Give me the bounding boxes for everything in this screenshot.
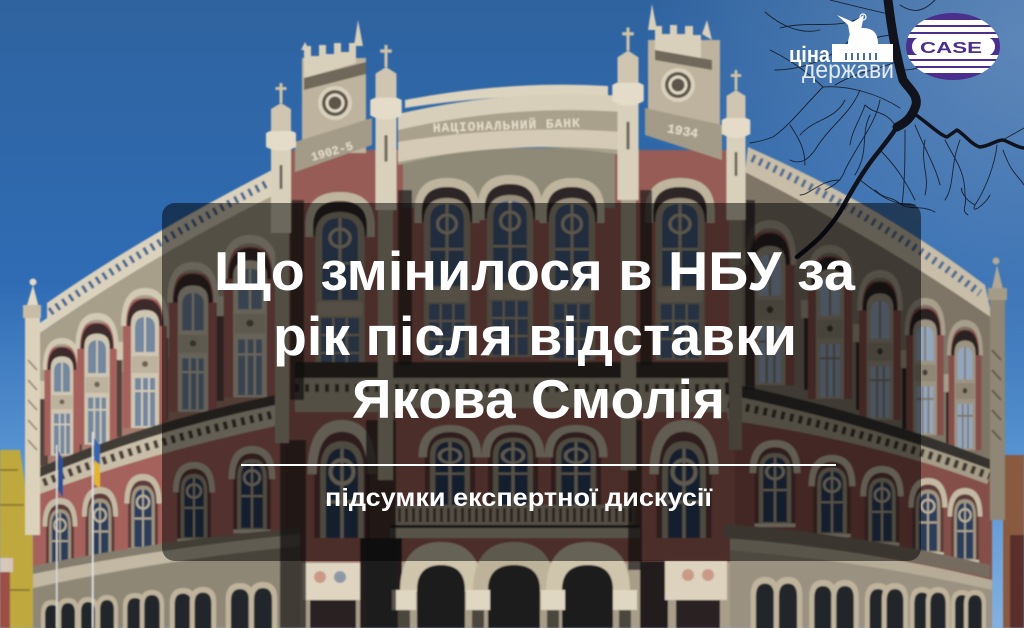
facade: centre rusticated stone: [403, 148, 615, 208]
logo: CASE: [900, 13, 1010, 80]
central portal arches: [392, 542, 637, 628]
ground floor centre: [300, 538, 730, 628]
lower cornice: left: [33, 534, 300, 588]
left tower: 1902-5: [309, 139, 355, 165]
facade: right wing wall: [725, 165, 992, 628]
lower row windows: centre: [308, 420, 718, 563]
ground floor stone: right: [725, 542, 992, 628]
turret lower shafts: [275, 200, 742, 480]
lower cornice: right: [725, 538, 992, 590]
logo wordmark: ціна: [789, 42, 831, 67]
lower row windows: right wing: [750, 440, 982, 563]
ground floor arcade: right: [751, 577, 986, 628]
turrets: [266, 28, 750, 233]
centre balcony band: [295, 362, 728, 412]
background: neighbouring brick building right: [1003, 455, 1024, 628]
logo wordmark: CASE: [920, 40, 982, 57]
right sill band: [725, 524, 990, 578]
pilasters: [37, 296, 957, 466]
facade: centre brick: [285, 150, 735, 628]
left wing middle cornice: [33, 393, 285, 495]
left tower: [295, 20, 372, 172]
title: Якова Смолія: [352, 368, 725, 430]
ground floor stone: left: [33, 540, 300, 628]
facade: left wing lower brick: [33, 405, 300, 628]
dark title panel: [162, 203, 921, 561]
facade: right wing lower brick: [725, 400, 992, 628]
logo: Ціна держави: держави: [802, 56, 894, 84]
title: Що змінилося в НБУ за: [214, 240, 855, 302]
tree branches: [750, 0, 1024, 257]
logo icon: parliament with bird: [832, 14, 893, 62]
divider line: [241, 464, 836, 466]
subtitle: підсумки експертної дискусії: [325, 484, 713, 512]
left sill band: [33, 528, 300, 582]
balconies: [303, 561, 727, 628]
shadow columns: [280, 190, 755, 628]
background: scaffolded neighbouring building: [0, 450, 34, 628]
right tower: 1934: [666, 121, 699, 142]
upper row windows: centre: [305, 175, 715, 374]
right tower: [645, 4, 722, 160]
title: [214, 240, 855, 430]
upper row windows: right wing: [744, 220, 983, 450]
right wing balustrade: [745, 147, 992, 318]
facade: left wing upper brick: [33, 320, 290, 480]
flags: [56, 432, 100, 628]
facade: centre inscription band: НАЦІОНАЛЬНИЙ БАНК: [433, 116, 580, 136]
ground floor arcade: left: [41, 582, 277, 628]
facade: centre inscription band: [398, 85, 622, 165]
left wing balustrade: [30, 170, 272, 340]
centre balustrade: [390, 505, 640, 538]
logo: Ціна держави: [789, 14, 894, 84]
outer left turret: [23, 278, 41, 535]
lower row windows: left wing: [43, 446, 275, 573]
outer right turret: [988, 258, 1007, 520]
right wing middle cornice: [725, 382, 997, 484]
upper row windows: left wing: [43, 235, 279, 456]
facade: left wing wall: [33, 185, 300, 628]
title: рік після відставки: [273, 305, 797, 367]
